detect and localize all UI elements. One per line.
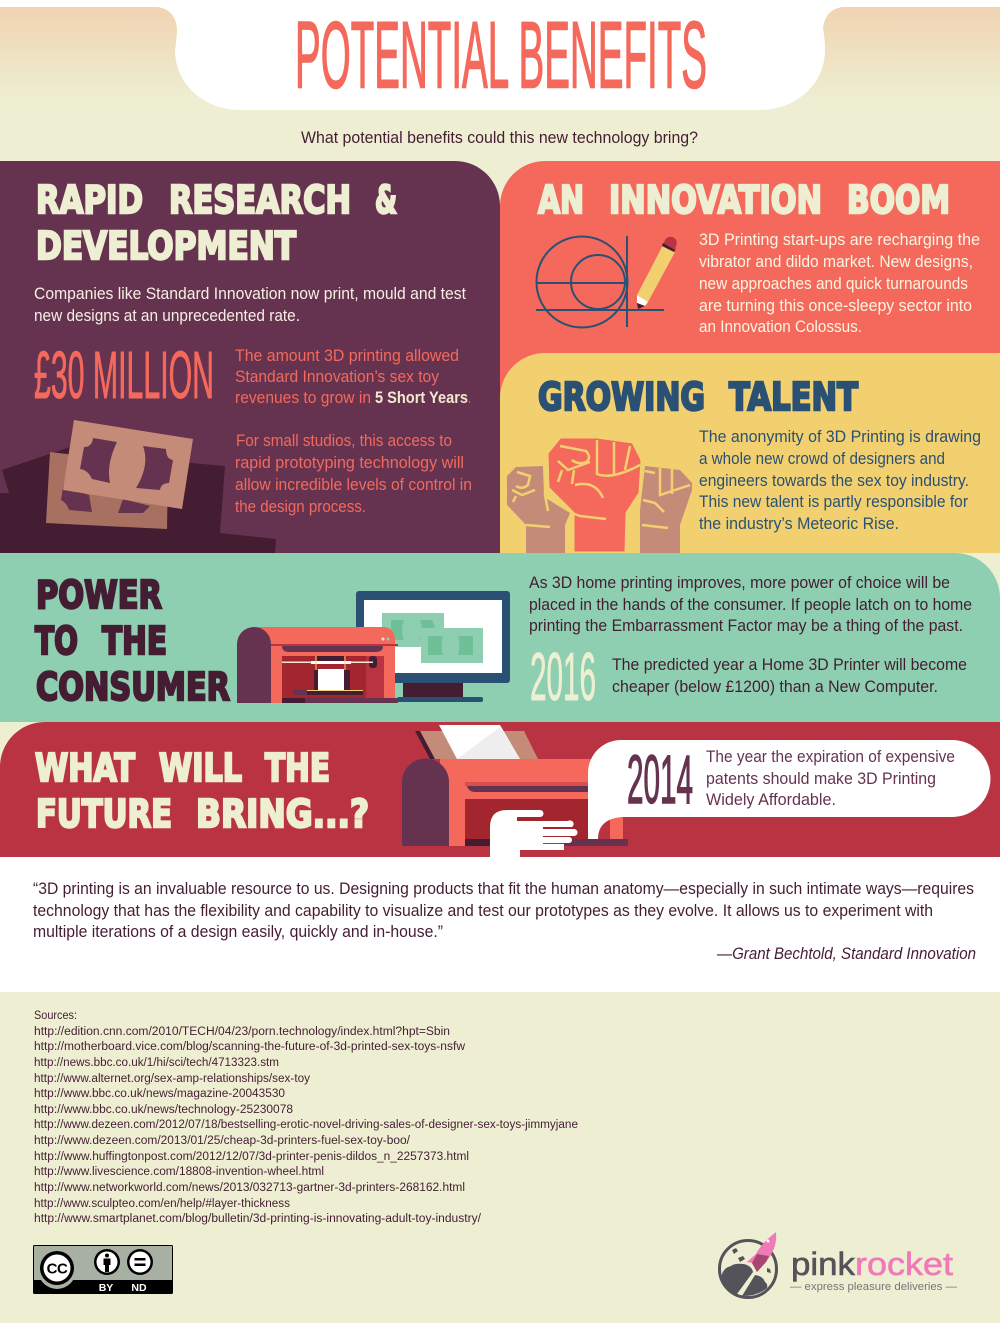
heading: rapid research and development: RAPID <box>36 178 143 222</box>
consumer text: placed in the hands of the consumer. If people latch on to home <box>529 596 972 614</box>
sources list: http://www.dezeen.com/2013/01/25/cheap-3d-printers-fuel-sex-toy-boo/ <box>34 1135 411 1147</box>
panel: rapid research and development <box>0 161 500 553</box>
icon: 3D printer <box>237 627 398 703</box>
quote attribution: —Grant Bechtold, Standard Innovation <box>716 945 976 963</box>
heading: what will the future bring: FUTURE <box>36 792 172 836</box>
consumer text <box>529 574 972 635</box>
2016 description: The predicted year a Home 3D Printer will become <box>612 656 967 674</box>
innovation text: 3D Printing start-ups are recharging the <box>699 231 980 249</box>
subtitle: What potential benefits could this new technology bring? <box>301 129 698 147</box>
statistic description <box>235 347 471 407</box>
panel: growing talent <box>500 353 1000 553</box>
icon: white hand <box>490 810 578 857</box>
sources list: http://www.huffingtonpost.com/2012/12/07/3d-printer-penis-dildos_n_2257373.html <box>34 1151 469 1163</box>
sources list: http://www.dezeen.com/2012/07/18/bestselling-erotic-novel-driving-sales-of-designer-sex-toys-jimmyjane <box>34 1119 578 1131</box>
heading: what will the future bring: WHAT <box>35 746 135 790</box>
heading: power to the consumer: POWER <box>36 573 162 617</box>
panel: an innovation boom <box>500 161 1000 420</box>
heading: what will the future bring: BRING...? <box>196 792 369 836</box>
heading: an innovation boom: AN <box>538 178 584 222</box>
sources list: http://www.livescience.com/18808-invention-wheel.html <box>34 1166 324 1178</box>
heading: rapid research and development: & <box>375 178 397 222</box>
innovation text: vibrator and dildo market. New designs, <box>699 253 973 271</box>
icon: geometry drawing and pencil <box>536 236 677 328</box>
statistic description: 5 Short Years <box>375 389 468 407</box>
sources list <box>34 1010 578 1225</box>
icon: raised fists <box>507 437 692 553</box>
sources list: http://www.sculpteo.com/en/help/#layer-thickness <box>34 1198 290 1210</box>
header <box>0 0 1000 161</box>
statistic description: Standard Innovation’s sex toy <box>235 368 440 386</box>
sources list: http://www.networkworld.com/news/2013/032713-gartner-3d-printers-268162.html <box>34 1182 465 1194</box>
heading: growing talent <box>538 375 858 419</box>
sources list: http://news.bbc.co.uk/1/hi/sci/tech/4713323.stm <box>34 1057 279 1069</box>
2014 description <box>706 748 955 809</box>
sources list: http://edition.cnn.com/2010/TECH/04/23/porn.technology/index.html?hpt=Sbin <box>34 1026 450 1038</box>
sources list: http://www.smartplanet.com/blog/bulletin/3d-printing-is-innovating-adult-toy-industry/ <box>34 1213 482 1225</box>
heading: what will the future bring: THE <box>265 746 330 790</box>
consumer text: As 3D home printing improves, more power of choice will be <box>529 574 950 592</box>
panel: power to the consumer <box>0 553 1000 722</box>
icon: printer with paper and hand <box>402 725 628 857</box>
small studios text <box>235 432 472 516</box>
icon: money pile <box>0 420 276 553</box>
sources list: http://www.alternet.org/sex-amp-relationships/sex-toy <box>34 1073 310 1085</box>
callout: 2014 speech bubble <box>588 740 990 839</box>
intro text <box>34 285 466 325</box>
small studios text: the design process. <box>235 498 366 516</box>
heading: power to the consumer: CONSUMER <box>36 665 230 709</box>
icon: creative commons badge: BY <box>99 1282 113 1294</box>
logo: pinkrocket <box>720 1232 957 1298</box>
heading: an innovation boom: INNOVATION <box>609 178 822 222</box>
statistic description: revenues to grow in <box>235 389 371 407</box>
small studios text: allow incredible levels of control in <box>235 476 472 494</box>
icon: creative commons badge <box>33 1245 173 1294</box>
2014 description: The year the expiration of expensive <box>706 748 955 766</box>
innovation text <box>699 231 980 336</box>
icon: creative commons badge: ND <box>131 1282 147 1294</box>
intro text: Companies like Standard Innovation now print, mould and test <box>34 285 466 303</box>
panel: quote <box>0 857 1000 992</box>
heading: rapid research and development: DEVELOPMENT <box>36 224 296 268</box>
heading: power to the consumer: TO <box>35 619 78 663</box>
logo: pinkrocket: rocket <box>855 1246 953 1282</box>
sources list: http://motherboard.vice.com/blog/scanning-the-future-of-3d-printed-sex-toys-nsfw <box>34 1041 466 1053</box>
icon: computer monitor <box>356 591 510 702</box>
small studios text: For small studios, this access to <box>236 432 452 450</box>
callout: 2014 speech bubble: 2014 <box>627 741 693 818</box>
quote text <box>33 880 974 941</box>
talent text: a whole new crowd of designers and <box>699 450 945 468</box>
small studios text: rapid prototyping technology will <box>235 454 464 472</box>
2014 description: patents should make 3D Printing <box>706 770 936 788</box>
2014 description: Widely Affordable. <box>706 791 836 809</box>
innovation text: new approaches and quick turnarounds <box>699 275 968 293</box>
quote text: multiple iterations of a design easily, quickly and in-house.” <box>33 923 443 941</box>
heading: power to the consumer <box>35 573 230 709</box>
talent text: engineers towards the sex toy industry. <box>699 472 969 490</box>
heading: what will the future bring: WILL <box>159 746 242 790</box>
consumer text: printing the Embarrassment Factor may be a thing of the past. <box>529 617 963 635</box>
heading: what will the future bring <box>35 746 369 836</box>
heading: an innovation boom <box>538 178 950 222</box>
sources list: http://www.bbc.co.uk/news/technology-25230078 <box>34 1104 293 1116</box>
talent text: the industry’s Meteoric Rise. <box>699 515 899 533</box>
heading: growing talent: TALENT <box>729 375 858 419</box>
heading: rapid research and development <box>36 178 397 268</box>
sources list: http://www.bbc.co.uk/news/magazine-20043530 <box>34 1088 285 1100</box>
quote text: technology that has the flexibility and capability to visualize and test our prototypes as they evolve. It allows us to experiment with <box>33 902 933 920</box>
panel: rapid research and development: £30 MILLION <box>34 338 214 413</box>
quote text: “3D printing is an invaluable resource to us. Designing products that fit the human anatomy—especially in such intimate ways—requires <box>33 880 974 898</box>
2016 description <box>612 656 967 696</box>
panel: power to the consumer: 2016 <box>530 639 596 715</box>
2016 description: cheaper (below £1200) than a New Computer. <box>612 678 938 696</box>
intro text: new designs at an unprecedented rate. <box>34 307 300 325</box>
talent text: This new talent is partly responsible for <box>699 493 968 511</box>
heading: an innovation boom: BOOM <box>847 178 950 222</box>
heading: growing talent: GROWING <box>538 375 705 419</box>
heading: rapid research and development: RESEARCH <box>169 178 351 222</box>
talent text: The anonymity of 3D Printing is drawing <box>699 428 981 446</box>
innovation text: are turning this once-sleepy sector into <box>699 297 972 315</box>
statistic description: . <box>468 389 471 407</box>
talent text <box>699 428 981 533</box>
sources list: Sources: <box>34 1010 77 1022</box>
heading: power to the consumer: THE <box>102 619 167 663</box>
panel: what will the future bring <box>0 722 1000 857</box>
icon: creative commons badge: CC <box>47 1260 68 1278</box>
icon: rocket in circle <box>720 1232 776 1298</box>
innovation text: an Innovation Colossus. <box>699 318 862 336</box>
logo tagline: — express pleasure deliveries — <box>790 1281 957 1293</box>
logo wordmark: pink <box>791 1246 856 1282</box>
statistic description: The amount 3D printing allowed <box>235 347 459 365</box>
